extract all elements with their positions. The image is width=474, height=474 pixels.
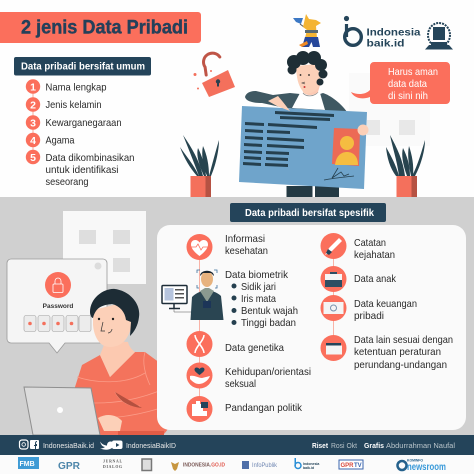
text: health information: kesehatan xyxy=(225,245,268,257)
text: biometric data: Sidik jari xyxy=(241,281,276,293)
text: criminal record: kejahatan xyxy=(354,249,395,261)
text: sexual orientation: Kehidupan/orientasi xyxy=(225,366,311,378)
text: financial data: Data keuangan xyxy=(354,298,417,310)
speech bubble: di sini nih xyxy=(388,90,428,102)
numbered list: Data dikombinasikan xyxy=(46,152,135,164)
icon: open padlock xyxy=(194,52,235,97)
icon: facebook xyxy=(30,440,39,449)
text: criminal record xyxy=(354,237,395,261)
logo: FMB9 xyxy=(18,457,39,469)
numbered list: seseorang xyxy=(46,176,89,188)
text: financial data: pribadi xyxy=(354,310,384,322)
logo: GPR: GPR xyxy=(58,460,80,472)
ID card xyxy=(239,96,368,189)
text: genetics: Data genetika xyxy=(225,342,284,354)
footer: social media and credits xyxy=(0,435,474,455)
logo: kominfo newsroom: KOMINFO xyxy=(407,458,423,462)
speech bubble: data data xyxy=(388,78,427,90)
logo: GPR TV: TV xyxy=(354,463,362,469)
text: child data: Data anak xyxy=(354,273,397,285)
logo: kominfo newsroom: newsroom xyxy=(407,462,446,473)
logo: indonesia baik: Indonesia xyxy=(366,26,421,38)
icon: puzzle xyxy=(186,396,212,422)
logo: indonesia baik xyxy=(344,16,421,49)
text: political views: Pandangan politik xyxy=(225,402,303,414)
logo: jurnal dialog: JURNAL xyxy=(103,460,122,464)
icon: heart in hand xyxy=(186,362,212,388)
text: other data xyxy=(354,334,453,371)
logo: indonesia.go.id: INDONESIA.GO.ID xyxy=(183,462,225,468)
numbered list: 4 xyxy=(30,135,36,147)
text: health information: Informasi xyxy=(225,233,265,245)
icon: right potted plant xyxy=(386,135,425,197)
text: sexual orientation: seksual xyxy=(225,378,256,390)
title banner: 2 jenis Data Pribadi xyxy=(21,18,188,38)
illustration: biometric scan xyxy=(162,270,224,320)
icon: DNA xyxy=(186,331,212,357)
sweater xyxy=(75,352,173,435)
icon: mascot xyxy=(293,14,321,47)
logo: infopublik: InfoPublik xyxy=(252,463,278,469)
logo: GPR TV: GPR xyxy=(340,463,354,469)
icon: finance xyxy=(320,295,346,321)
text: criminal record: Catatan xyxy=(354,237,386,249)
logos: mascot, Indonesia Baik, award xyxy=(293,14,453,50)
icon: award badge xyxy=(425,23,453,50)
text: credits: Grafis xyxy=(364,443,384,450)
logo: indonesia.go.id xyxy=(171,462,225,471)
man body xyxy=(245,51,347,197)
speech bubble xyxy=(351,62,450,104)
text: financial data xyxy=(354,298,417,322)
logo: kominfo newsroom xyxy=(398,458,446,473)
numbered list xyxy=(26,79,135,188)
logo: infopublik xyxy=(242,461,278,469)
logo: jurnal dialog: DIALOG xyxy=(103,465,122,469)
logo: indonesia baik small xyxy=(294,458,319,470)
logo: jurnal dialog xyxy=(103,460,122,469)
speech bubble: Harus aman xyxy=(388,66,438,78)
text: sexual orientation xyxy=(225,366,311,390)
numbered list: 2 xyxy=(30,100,36,112)
numbered list: untuk identifikasi xyxy=(46,164,118,176)
text: biometric data xyxy=(225,269,298,329)
text: other data: ketentuan peraturan xyxy=(354,346,441,358)
text: credits: Rosi Okt xyxy=(331,443,357,450)
neck and chest xyxy=(100,340,135,377)
heading: general data: Data pribadi bersifat umum xyxy=(21,62,145,72)
numbered list: Agama xyxy=(46,134,75,146)
numbered list: 1 xyxy=(30,82,36,94)
icon: left potted plant xyxy=(180,135,219,197)
logo: indonesia baik small: baik.id xyxy=(303,466,314,470)
faint browser window xyxy=(63,211,146,284)
icon: instagram xyxy=(20,440,28,449)
logo: indonesia baik: baik.id xyxy=(366,38,404,50)
numbered list: Kewarganegaraan xyxy=(46,117,122,129)
text: biometric data: Bentuk wajah xyxy=(241,305,298,317)
text: health information xyxy=(225,233,268,257)
panel: specific personal data xyxy=(157,203,466,430)
numbered list: Nama lengkap xyxy=(46,82,107,94)
numbered list: 5 xyxy=(30,152,36,164)
icon: youtube xyxy=(112,440,122,449)
panel: grey lower section xyxy=(0,197,474,435)
sponsor logo strip xyxy=(0,455,474,474)
title banner xyxy=(0,12,201,43)
icon: twitter xyxy=(100,442,115,450)
numbered list: 3 xyxy=(30,118,36,130)
text: youtube handle: IndonesiaBaikID xyxy=(126,443,176,450)
icon: folder xyxy=(320,335,346,361)
text: indonesiabaik handle: IndonesiaBaik.id xyxy=(43,443,94,450)
logo: FMB9: FMB xyxy=(20,461,35,468)
text: biometric data: Iris mata xyxy=(241,293,276,305)
text: other data: Data lain sesuai dengan xyxy=(354,334,453,346)
password dialog: Password xyxy=(43,303,73,310)
hand xyxy=(98,415,122,431)
illustration: person on laptop xyxy=(24,289,173,435)
text: credits xyxy=(312,443,455,450)
heading: specific data: Data pribadi bersifat spesifik xyxy=(245,208,374,219)
panel: general personal data xyxy=(14,57,151,188)
icon: health xyxy=(186,234,212,260)
logo: indonesia baik small: Indonesia xyxy=(303,462,319,466)
text: credits: Riset xyxy=(312,443,329,450)
numbered list: Jenis kelamin xyxy=(46,99,102,111)
icon: child data xyxy=(320,266,346,292)
text: other data: perundang-undangan xyxy=(354,359,447,371)
logo: QR xyxy=(142,459,152,470)
illustration: man holding ID card xyxy=(239,51,368,197)
text: credits: Abdurrahman Naufal xyxy=(386,443,455,450)
face and hair xyxy=(90,289,139,347)
text: biometric data: Data biometrik xyxy=(225,269,289,281)
heading: specific data xyxy=(230,203,386,222)
laptop xyxy=(24,387,100,435)
faint window behind figure xyxy=(349,73,430,146)
text: biometric data: Tinggi badan xyxy=(241,317,296,329)
logo: GPR TV xyxy=(339,460,363,469)
icon: criminal record pen xyxy=(320,233,346,259)
password dialog xyxy=(7,259,107,353)
